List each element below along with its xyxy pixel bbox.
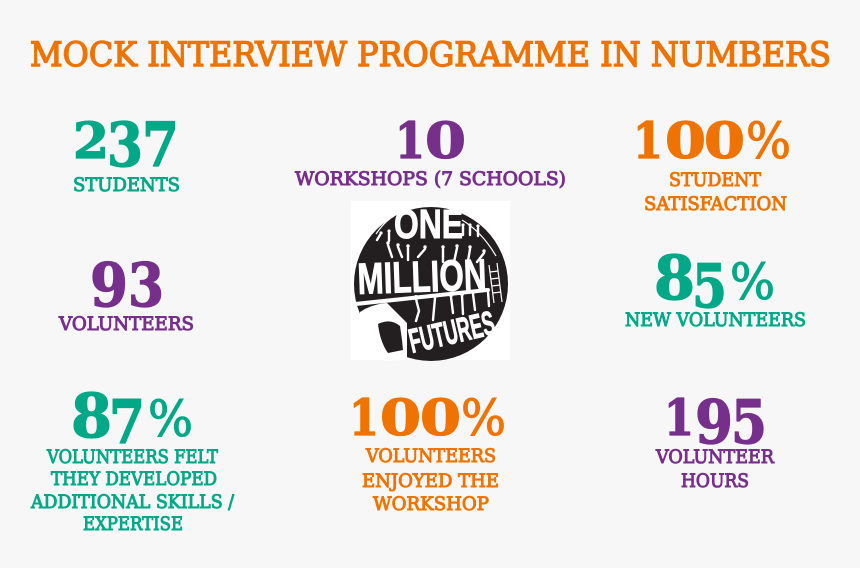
number: 237: 7 [142, 110, 179, 181]
label: new volunteers: NEW VOLUNTEERS [625, 309, 806, 331]
stat: 93 volunteers [58, 251, 194, 335]
stat: 237 students [73, 110, 180, 196]
stat: 85% new volunteers [625, 243, 806, 331]
label: volunteer hours: VOLUNTEER [655, 446, 775, 468]
number: 100: 0 [420, 388, 461, 447]
stat: 100% student satisfaction [633, 111, 791, 215]
number: 100: 1 [633, 111, 663, 170]
number: 85: 8 [654, 243, 695, 314]
number: 10: 1 [395, 111, 425, 170]
percent sign: % [746, 112, 791, 170]
stat: 195 volunteer hours [655, 388, 775, 492]
number: 195: 1 [664, 388, 694, 447]
number: 93: 3 [128, 251, 164, 321]
number: 87: 8 [71, 381, 112, 452]
number: 100: 1 [349, 388, 379, 447]
number: 195: 5 [731, 388, 767, 458]
number: 100: 0 [380, 388, 421, 447]
stat: 87% volunteers felt they developed skills [30, 381, 235, 535]
number: 100: 0 [665, 111, 706, 170]
label: developed additional skills: EXPERTISE [83, 513, 183, 535]
label: student satisfaction: SATISFACTION [644, 193, 787, 215]
stat: 100% volunteers enjoyed [349, 388, 506, 515]
label: volunteer hours: HOURS [681, 470, 749, 492]
label: students: STUDENTS [73, 174, 180, 196]
label: developed additional skills: ADDITIONAL SKILLS / [30, 491, 235, 513]
label: volunteers: VOLUNTEERS [58, 313, 194, 335]
label: developed additional skills: VOLUNTEERS FELT [46, 446, 218, 468]
percent sign: % [148, 390, 193, 448]
number: 85: 5 [692, 252, 727, 322]
number: 10: 0 [425, 111, 466, 170]
title: MOCK INTERVIEW PROGRAMME IN NUMBERS [30, 35, 831, 75]
number: 87: 7 [109, 388, 145, 458]
number: 93: 9 [90, 251, 128, 321]
label: volunteers enjoyed the workshop: WORKSHOP [373, 493, 489, 515]
logo: One Million Futures: ONE [394, 201, 463, 247]
logo: One Million Futures [351, 201, 510, 361]
number: 100: 0 [704, 111, 745, 170]
number: 237: 2 [73, 111, 109, 170]
label: volunteers enjoyed the workshop: ENJOYED THE [362, 470, 499, 492]
stat: 10 workshops [295, 111, 566, 190]
number: 237: 3 [107, 110, 143, 181]
label: workshops: WORKSHOPS (7 SCHOOLS) [295, 168, 566, 190]
percent sign: % [730, 253, 775, 311]
number: 195: 9 [695, 388, 733, 458]
label: student satisfaction: STUDENT [669, 169, 761, 191]
label: developed additional skills: THEY DEVELOPED [51, 468, 217, 490]
label: volunteers enjoyed the workshop: VOLUNTEERS [365, 445, 496, 467]
logo: One Million Futures: FUTURES [405, 304, 499, 361]
percent sign: % [461, 389, 506, 447]
logo: One Million Futures: MILLION [357, 251, 487, 304]
